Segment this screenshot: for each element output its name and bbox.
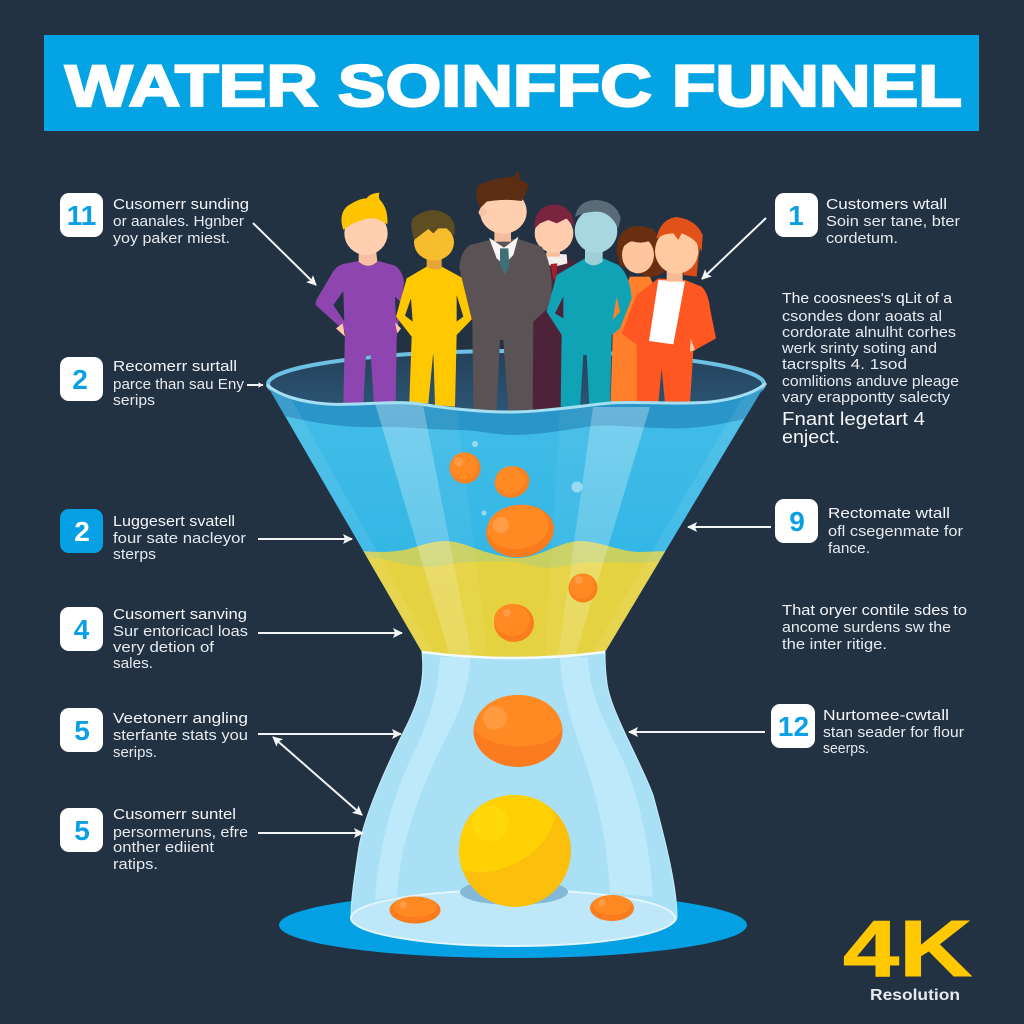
step text: sales. [113,656,153,672]
bubbles [472,441,582,516]
step text [826,197,960,247]
step text: Rectomate wtall [828,506,950,522]
arrow: step 4 to funnel [258,632,402,634]
step text: onther ediient [113,840,214,856]
step text: Recomerr surtall [113,359,237,375]
arrow: lower step 5 to vase [258,832,363,834]
badge 5 [60,708,103,752]
badge 9: 9 [789,506,805,537]
step text: seerps. [823,741,869,757]
step: 11 customer [60,193,249,247]
step text: Nurtomee-cwtall [823,708,949,724]
step text [113,359,245,409]
step: 1 customers [775,193,960,247]
water puddle base [279,892,747,958]
step text: Luggesert svatell [113,514,235,530]
text block: note: the inter ritige. [782,637,887,653]
person: maroon man (back) [533,204,577,410]
step text: Cusomert sanving [113,607,247,623]
step text: Cusomerr suntel [113,807,236,823]
step text: fance. [828,541,870,557]
step: 5 customer [60,807,248,873]
4K resolution badge: Resolution [870,987,960,1004]
badge 11: 11 [67,200,96,231]
funnel blue water body [267,383,766,658]
badge 9 [775,499,818,543]
funnel upper section [260,380,775,670]
arrow: step 5 to vase [258,733,401,735]
step: 2 lugge (blue badge) [60,509,246,563]
step: 9 rectomate [775,499,963,557]
step text: ratips. [113,857,158,873]
arrow: double-headed diagonal [273,737,362,815]
badge 1: 1 [788,200,804,231]
text block: description [781,291,959,447]
badge 2: 2 [72,364,88,395]
neck ring [422,652,605,658]
badge 1 [775,193,818,237]
4K resolution badge: 4K [843,904,972,993]
text block: description: enject. [782,427,840,447]
text block: description: csondes donr aoats al [782,309,942,325]
yellow ball with shadow [459,795,571,907]
arrow: step 9 to funnel [688,526,771,528]
person: grey suit [459,171,552,410]
group of people [316,171,716,410]
text block: note: ancome surdens sw the [782,620,951,636]
funnel front lip [267,383,766,412]
badge 5: 5 [74,715,90,746]
arrow: blue step 2 to funnel [258,538,352,540]
step text: cordetum. [826,231,898,247]
step text: Cusomerr sunding [113,197,249,213]
step: 2 recomer [60,357,245,409]
badge 4 [60,607,103,651]
step text: sterfante stats you [113,728,248,744]
step: 12 nurtomee [771,704,964,757]
arrow: step 11 to people [253,223,316,285]
step text: four sate nacleyor [113,531,246,547]
badge 2 [60,357,103,401]
badge 5 lower: 5 [74,815,90,846]
step text: serips. [113,745,157,761]
step text: Soin ser tane, bter [826,214,960,230]
step text: Sur entoricacl loas [113,624,248,640]
person: teal [547,200,632,408]
large orange ball [474,695,562,767]
step text [828,506,963,557]
step text: or aanales. Hgnber [113,214,244,230]
person: yellow [396,210,473,407]
vase floor [351,890,675,946]
text block: description: Fnant legetart 4 [782,409,925,429]
arrow: step 1 to people [702,218,766,279]
blue badge 2 [60,509,103,553]
person: orange woman (back) [611,226,665,405]
badge 12: 12 [778,711,809,742]
step: 4 customer [60,607,248,672]
lower glass vase [351,652,677,946]
step text: persormeruns, efre [113,825,248,841]
step text: Veetonerr angling [113,711,248,727]
step text [823,708,964,757]
step text: sterps [113,547,156,563]
text block: description: The coosnees's qLit of a [782,291,953,307]
step text: ofl csegenmate for [828,524,963,540]
text block: note: That oryer contile sdes to [782,603,967,619]
text block: description: cordorate alnulht corhes [782,325,956,341]
text block: description: tacrsplts 4. 1sod [782,357,907,373]
text block: description: comlitions anduve pleage [782,374,959,390]
person: purple [316,193,404,403]
arrow: step 12 to vase [629,731,765,733]
step text [113,807,248,873]
step text [113,607,248,672]
step text: yoy paker miest. [113,231,230,247]
step text: Customers wtall [826,197,947,213]
arrow: step 2 to rim [247,384,263,386]
badge 11 [60,193,103,237]
badge 5 lower [60,808,103,852]
text block: description: werk srinty soting and [781,341,937,357]
step text: stan seader for flour [823,725,964,741]
badge 4: 4 [74,614,90,645]
blue badge 2: 2 [74,516,90,547]
text block: description: vary erappontty salecty [782,390,951,406]
step text: very detion of [113,640,215,656]
step text [113,514,246,563]
orange balls in the funnel [450,452,598,642]
title banner [44,35,979,131]
funnel rim interior [268,351,764,417]
step text [113,711,248,761]
step text: parce than sau Eny [113,377,245,393]
text block: note [782,603,967,653]
title banner: WATER SOINFFC FUNNEL [65,54,962,119]
step text: serips [113,393,155,409]
badge 12 [771,704,815,748]
small orange balls at base [390,895,634,924]
person: red woman [622,217,716,403]
funnel glass shading and water layers [268,386,764,657]
step: 5 vectoner [60,708,248,761]
step text [113,197,249,247]
